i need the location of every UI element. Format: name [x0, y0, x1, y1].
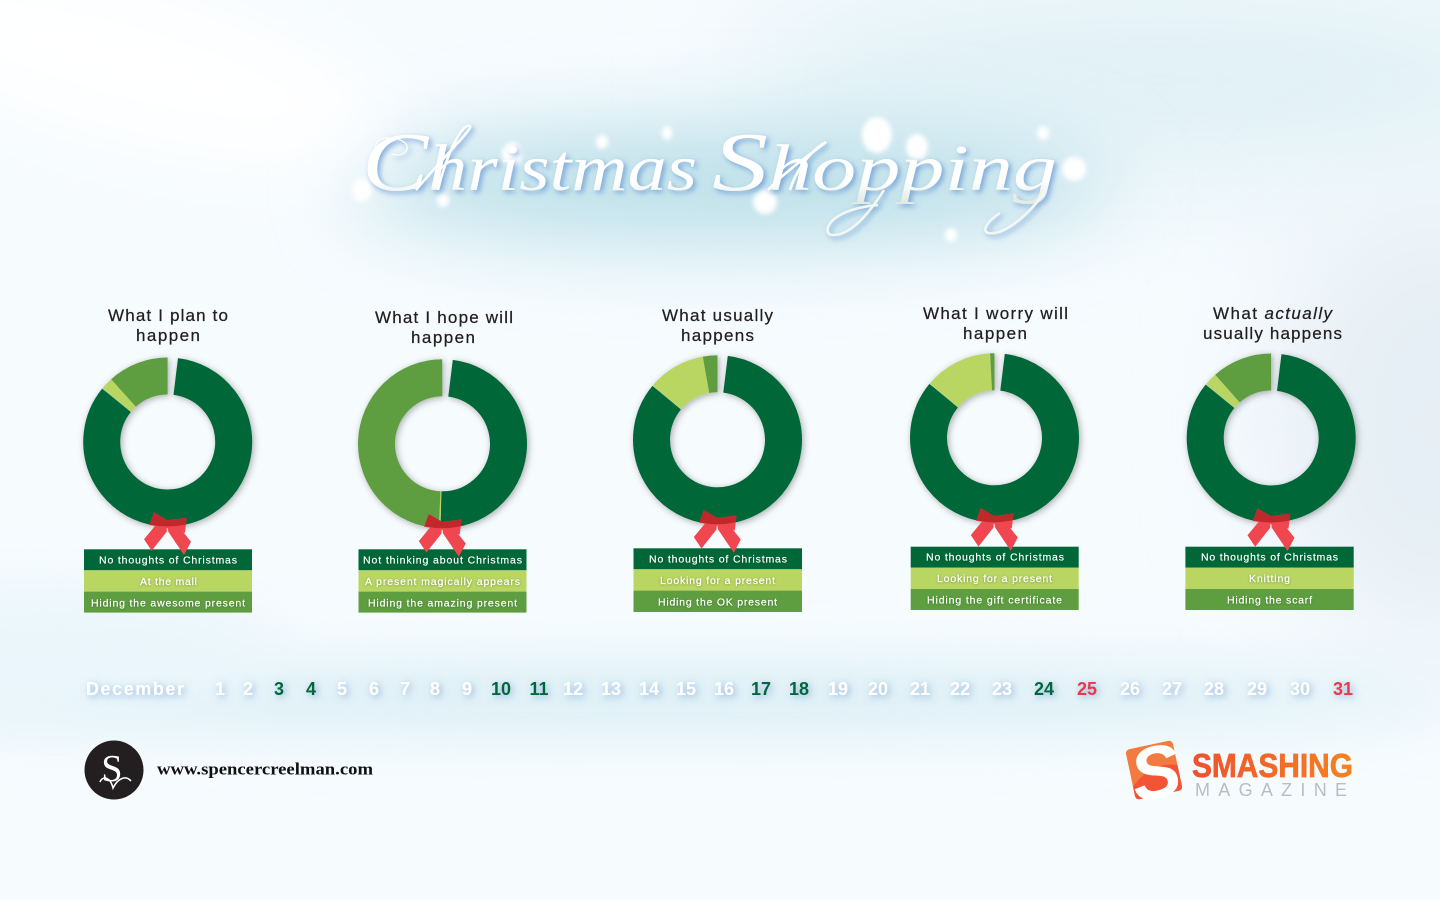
- calendar strip: 21: [910, 679, 930, 699]
- calendar strip: 11: [529, 679, 549, 699]
- legend: Hiding the gift certificate: [927, 594, 1062, 606]
- heading: What usually: [662, 306, 774, 325]
- legend: No thoughts of Christmas: [926, 552, 1064, 564]
- legend: [634, 548, 802, 612]
- legend: At the mall: [140, 576, 197, 588]
- title: [362, 116, 1057, 235]
- title: Shopping: [712, 116, 1057, 209]
- legend: Looking for a present: [937, 573, 1052, 585]
- legend: Not thinking about Christmas: [363, 554, 522, 566]
- heading: What I worry will: [923, 304, 1068, 323]
- legend: Looking for a present: [660, 575, 775, 587]
- heading: What actually: [1213, 304, 1334, 323]
- calendar strip: 26: [1120, 679, 1140, 699]
- donut chart: [902, 345, 1087, 551]
- heading: [108, 306, 228, 345]
- smashing magazine logo: [1122, 727, 1353, 818]
- legend: [358, 549, 526, 613]
- heading: happens: [681, 326, 754, 345]
- heading: [923, 304, 1068, 343]
- website url: www.spencercreelman.com: [157, 760, 373, 778]
- icon: spencer creelman logo: [84, 740, 144, 800]
- heading: [662, 306, 774, 345]
- calendar strip: 18: [789, 679, 809, 699]
- calendar strip: 23: [992, 679, 1012, 699]
- donut chart: [74, 349, 261, 555]
- title: Christmas: [362, 116, 697, 209]
- heading: happen: [963, 324, 1027, 343]
- legend: No thoughts of Christmas: [649, 554, 787, 566]
- calendar strip: 20: [868, 679, 888, 699]
- icon: smashing S: S: [1123, 727, 1188, 818]
- panel: what I hope will happen: [358, 308, 526, 613]
- legend: [911, 547, 1079, 610]
- calendar strip: 3: [274, 679, 284, 699]
- calendar strip: 24: [1034, 679, 1054, 699]
- calendar strip: 27: [1162, 679, 1182, 699]
- calendar strip: 7: [400, 679, 410, 699]
- calendar strip: 19: [828, 679, 848, 699]
- calendar strip: 25: [1077, 679, 1097, 699]
- legend: No thoughts of Christmas: [99, 554, 237, 566]
- donut chart: [625, 347, 810, 553]
- legend: A present magically appears: [365, 576, 520, 588]
- calendar strip: 22: [950, 679, 970, 699]
- panel: what usually happens: [625, 306, 810, 612]
- calendar strip: 9: [462, 679, 472, 699]
- calendar strip: 13: [601, 679, 621, 699]
- panel: what actually usually happens: [1178, 304, 1364, 610]
- donut chart: [369, 370, 516, 557]
- snow dots: [352, 117, 1086, 242]
- panel: what I plan to happen: [74, 306, 261, 613]
- legend: Hiding the OK present: [658, 596, 777, 608]
- calendar strip: 2: [243, 679, 253, 699]
- calendar strip: 14: [639, 679, 659, 699]
- smashing magazine logo: MAGAZINE: [1195, 780, 1347, 800]
- calendar strip: 4: [306, 679, 316, 699]
- legend: Knitting: [1249, 573, 1290, 585]
- legend: [1185, 547, 1354, 610]
- donut chart: [1178, 345, 1364, 551]
- calendar strip: 28: [1204, 679, 1224, 699]
- calendar strip: 17: [751, 679, 771, 699]
- calendar strip: 5: [337, 679, 347, 699]
- heading: [1203, 304, 1342, 343]
- calendar strip: 10: [491, 679, 511, 699]
- calendar strip: 15: [676, 679, 696, 699]
- heading: happen: [411, 328, 475, 347]
- calendar strip: [86, 679, 1353, 699]
- legend: No thoughts of Christmas: [1201, 552, 1338, 564]
- legend: [84, 549, 252, 613]
- legend: Hiding the awesome present: [91, 598, 245, 610]
- calendar strip: 1: [215, 679, 225, 699]
- heading: What I plan to: [108, 306, 228, 325]
- heading: usually happens: [1203, 324, 1342, 343]
- calendar strip: December: [86, 679, 184, 699]
- heading: [375, 308, 513, 347]
- heading: happen: [136, 326, 200, 345]
- heading: What I hope will: [375, 308, 513, 327]
- calendar strip: 29: [1247, 679, 1267, 699]
- wordmark: SMASHING: [1192, 747, 1353, 784]
- calendar strip: 12: [563, 679, 583, 699]
- calendar strip: 8: [430, 679, 440, 699]
- legend: Hiding the scarf: [1227, 594, 1312, 606]
- legend: Hiding the amazing present: [368, 598, 517, 610]
- calendar strip: 31: [1333, 679, 1353, 699]
- calendar strip: 16: [714, 679, 734, 699]
- panel: what I worry will happen: [902, 304, 1087, 610]
- icon: spencer creelman logo: S: [101, 748, 123, 790]
- calendar strip: 6: [369, 679, 379, 699]
- calendar strip: 30: [1290, 679, 1310, 699]
